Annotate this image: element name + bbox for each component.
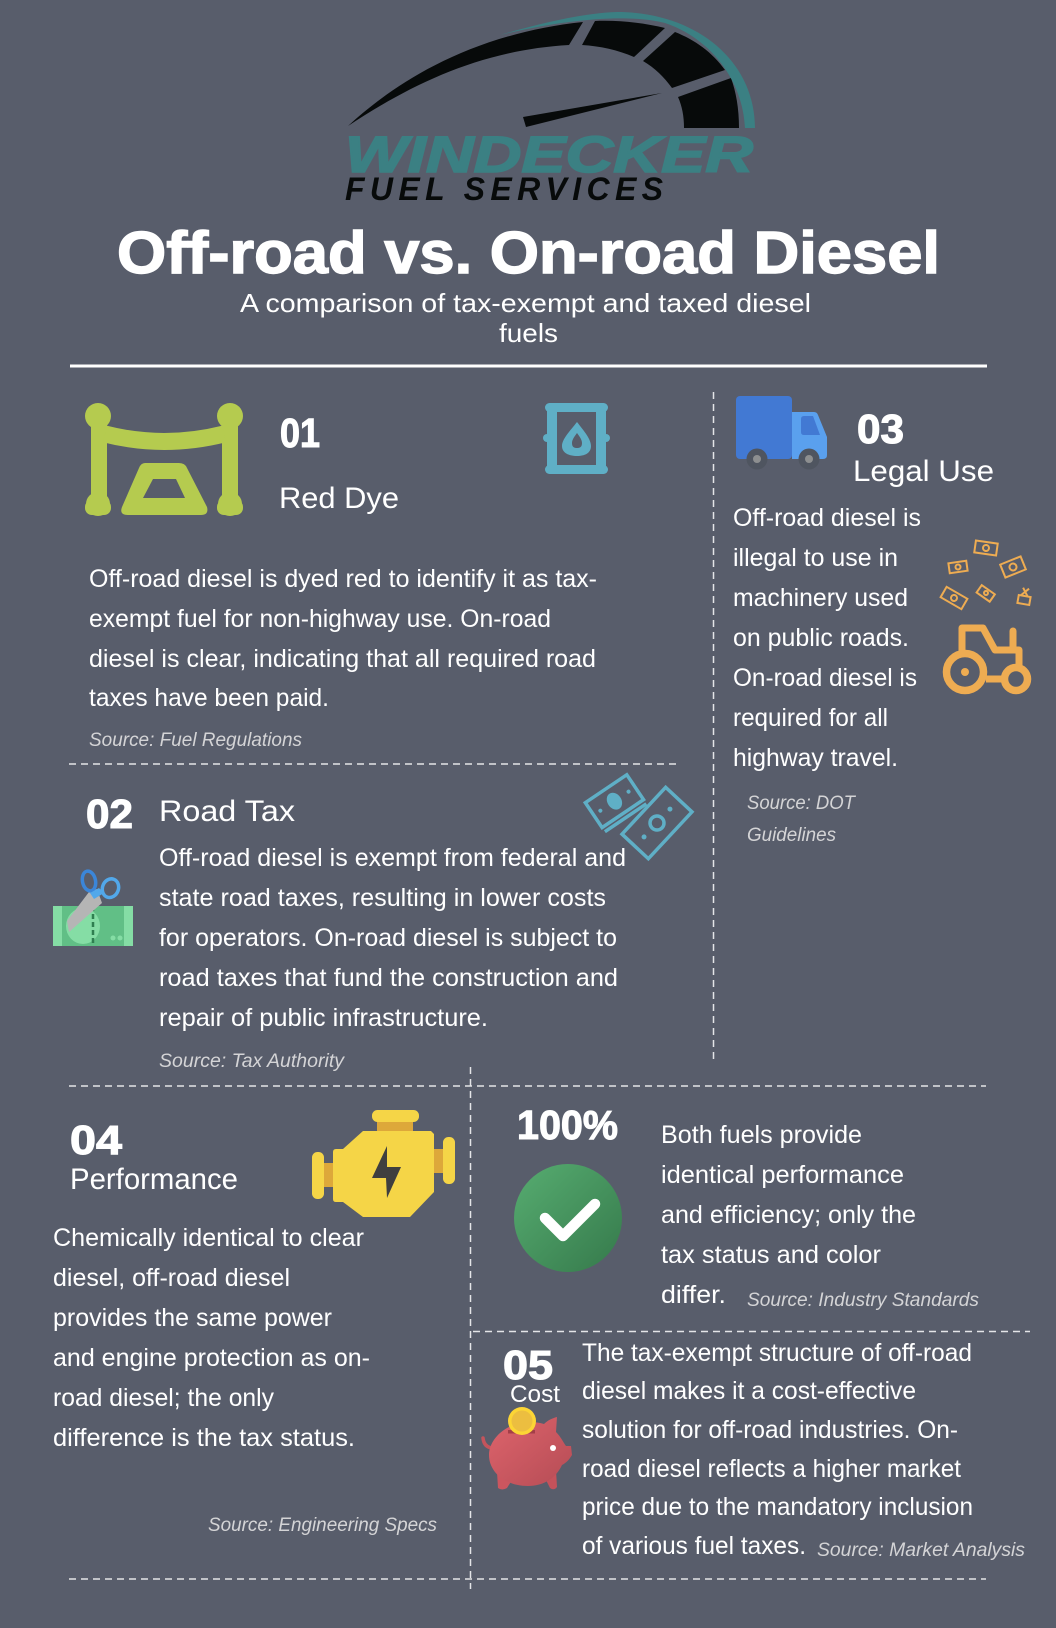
- body text: [582, 1339, 973, 1560]
- body text: On-road diesel is: [733, 664, 917, 692]
- body text: The tax-exempt structure of off-road: [582, 1339, 972, 1367]
- subtitle: [240, 288, 811, 348]
- number 03: 03: [857, 406, 904, 452]
- body text: state road taxes, resulting in lower costs: [159, 884, 606, 912]
- source: [747, 792, 857, 846]
- body text: provides the same power: [53, 1304, 332, 1332]
- body text: [89, 565, 597, 712]
- body text: [159, 844, 626, 1032]
- body text: of various fuel taxes.: [582, 1532, 806, 1560]
- body text: differ.: [661, 1281, 726, 1309]
- subtitle: A comparison of tax-exempt and taxed diesel: [240, 288, 811, 318]
- body text: and engine protection as on-: [53, 1344, 370, 1372]
- subtitle: fuels: [499, 318, 558, 348]
- body text: [661, 1121, 916, 1309]
- body text: [53, 1224, 370, 1452]
- heading: Cost: Cost: [510, 1381, 560, 1408]
- heading: Red Dye: Red Dye: [279, 482, 399, 515]
- heading: Legal Use: Legal Use: [853, 455, 994, 488]
- number 04: 04: [70, 1117, 122, 1163]
- body text: diesel makes it a cost-effective: [582, 1377, 916, 1405]
- panel: 100% identical performance: [514, 1102, 979, 1311]
- body text: solution for off-road industries. On-: [582, 1416, 958, 1444]
- panel: 04 performance: [53, 1110, 455, 1536]
- source: Source: Fuel Regulations: [89, 729, 302, 751]
- body text: and efficiency; only the: [661, 1201, 916, 1229]
- body text: repair of public infrastructure.: [159, 1004, 488, 1032]
- icon: check mark: [514, 1164, 622, 1272]
- body text: diesel, off-road diesel: [53, 1264, 290, 1292]
- source: Source: Market Analysis: [817, 1539, 1025, 1561]
- body text: tax status and color: [661, 1241, 881, 1269]
- icon: piggy bank: [483, 1407, 572, 1490]
- icon: stanchion barrier: [85, 403, 243, 516]
- number 02: 02: [86, 791, 133, 837]
- number 05: 05: [503, 1342, 553, 1388]
- icon: flying money: [941, 541, 1032, 609]
- icon: oil barrel: [543, 403, 610, 474]
- body text: illegal to use in: [733, 544, 898, 572]
- body text: Off-road diesel is: [733, 504, 921, 532]
- panel: 02 road tax: [53, 775, 692, 1072]
- body text: for operators. On-road diesel is subject to: [159, 924, 617, 952]
- source: Source: Tax Authority: [159, 1050, 345, 1072]
- icon: engine: [312, 1110, 455, 1217]
- body text: road taxes that fund the construction and: [159, 964, 618, 992]
- title: Off-road vs. On-road Diesel: [117, 220, 940, 286]
- body text: [733, 504, 921, 772]
- body text: price due to the mandatory inclusion: [582, 1493, 973, 1521]
- stat: 100%: 100%: [517, 1102, 618, 1148]
- body text: machinery used: [733, 584, 908, 612]
- body text: difference is the tax status.: [53, 1424, 355, 1452]
- logo: Windecker Fuel Services: FUEL SERVICES: [345, 171, 664, 207]
- icon: scissors cutting money: [53, 870, 133, 946]
- icon: banknotes: [585, 775, 692, 859]
- source: Source: Industry Standards: [747, 1289, 979, 1311]
- body text: Off-road diesel is exempt from federal and: [159, 844, 626, 872]
- source: Source: Engineering Specs: [208, 1514, 437, 1536]
- body text: Both fuels provide: [661, 1121, 862, 1149]
- body text: Off-road diesel is dyed red to identify it as tax-: [89, 565, 597, 593]
- number 01: 01: [280, 410, 320, 456]
- body text: road diesel reflects a higher market: [582, 1455, 961, 1483]
- body text: identical performance: [661, 1161, 904, 1189]
- body text: Chemically identical to clear: [53, 1224, 364, 1252]
- logo: Windecker Fuel Services: [345, 12, 755, 207]
- icon: tractor: [946, 628, 1028, 690]
- icon: truck: [736, 396, 827, 470]
- panel: 05 cost: [483, 1339, 1025, 1561]
- body text: taxes have been paid.: [89, 684, 329, 712]
- panel: 03 legal use: [733, 396, 1032, 846]
- body text: road diesel; the only: [53, 1384, 274, 1412]
- heading: Road Tax: Road Tax: [159, 795, 295, 828]
- body text: highway travel.: [733, 744, 898, 772]
- logo: Windecker Fuel Services: WINDECKER: [345, 126, 753, 183]
- body text: diesel is clear, indicating that all required road: [89, 645, 596, 673]
- heading: Performance: Performance: [70, 1163, 238, 1196]
- panel: 01 red dye: [85, 403, 610, 751]
- source: Source: DOT: [747, 792, 857, 814]
- body text: exempt fuel for non-highway use. On-road: [89, 605, 551, 633]
- source: Guidelines: [747, 824, 836, 846]
- body text: on public roads.: [733, 624, 909, 652]
- body text: required for all: [733, 704, 888, 732]
